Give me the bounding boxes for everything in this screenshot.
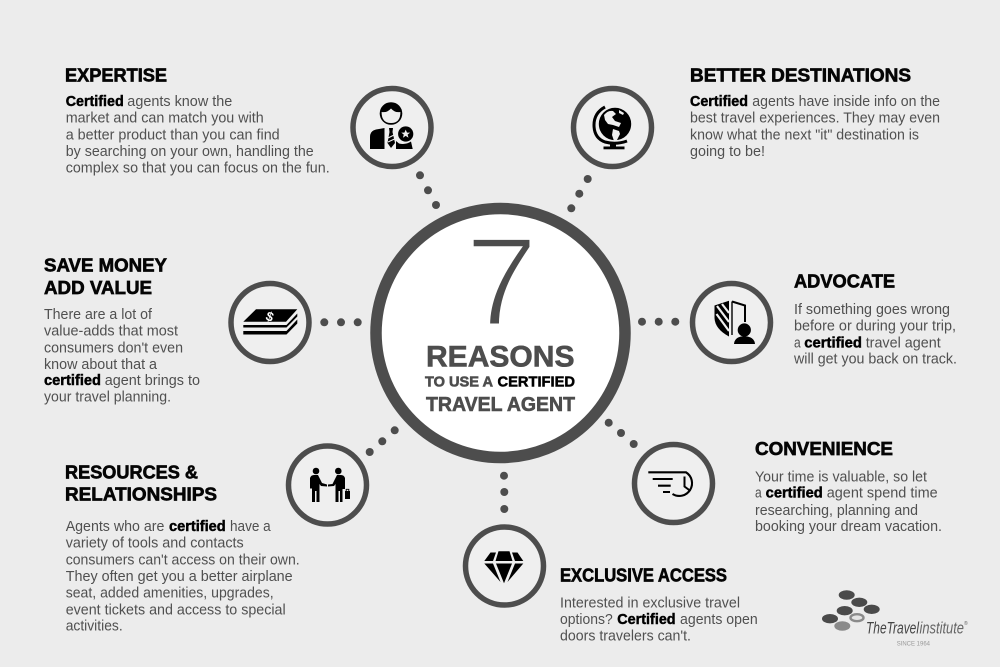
body: resources: activities.	[66, 619, 123, 635]
body: advocate: will get you back on track.	[793, 352, 957, 368]
icon: stack of money	[231, 284, 309, 362]
logo wordmark: institute	[920, 619, 964, 637]
icon: handshake	[288, 446, 366, 524]
body: exclusive access: Certified	[617, 612, 676, 628]
body: resources: variety of tools and contacts	[66, 536, 244, 552]
body: resources: have a	[230, 519, 272, 535]
body: expertise: a better product than you can find	[66, 127, 280, 143]
heading: resources and relationships	[65, 461, 217, 505]
panel: convenience	[755, 438, 942, 535]
body: convenience	[755, 470, 942, 535]
body: better destinations: going to be!	[690, 144, 765, 160]
body: expertise: by searching on your own, handling the	[66, 144, 314, 160]
body: exclusive access	[560, 595, 758, 645]
body: convenience: researching, planning and	[755, 503, 918, 519]
body: save money: know about that a	[44, 357, 158, 373]
body: convenience: booking your dream vacation.	[755, 519, 942, 535]
logo tagline: SINCE 1964	[897, 641, 930, 648]
body: advocate: certified	[804, 335, 862, 351]
heading: save money add value: ADD VALUE	[44, 277, 152, 298]
body: advocate: before or during your trip,	[794, 319, 956, 335]
heading: expertise: EXPERTISE	[65, 65, 167, 86]
heading: convenience: CONVENIENCE	[755, 438, 893, 459]
heading: advocate: ADVOCATE	[794, 271, 895, 292]
connector dots: better destinations	[567, 175, 592, 212]
body: resources	[66, 519, 300, 635]
body: resources: event tickets and access to special	[66, 602, 286, 618]
logo wordmark: TheTravel	[866, 619, 920, 637]
body: expertise: complex so that you can focus on the fun.	[66, 161, 330, 177]
connector dots: exclusive access	[500, 472, 508, 513]
connector dots: convenience	[605, 419, 638, 448]
body: advocate: travel agent	[866, 335, 941, 351]
hub subtitle: to use a certified	[425, 374, 575, 391]
panel: resources and relationships	[65, 461, 300, 635]
logo wordmark: ®	[964, 620, 968, 627]
connector dots: expertise	[416, 171, 440, 209]
body: advocate: If something goes wrong	[794, 302, 950, 318]
heading: resources and relationships: RELATIONSHIPS	[65, 484, 217, 505]
body: exclusive access: options?	[560, 612, 613, 628]
connector dots: save money	[320, 318, 362, 326]
numeral 7: 7	[466, 211, 538, 352]
body: resources: Agents who are	[66, 519, 164, 535]
heading: save money add value: SAVE MONEY	[44, 255, 168, 276]
logo: The Travel Institute	[822, 590, 968, 648]
body: convenience: agent spend time	[827, 486, 938, 502]
body: save money: agent brings to	[105, 373, 200, 389]
body: advocate	[793, 302, 957, 368]
icon: diamond	[466, 527, 544, 605]
panel: save money add value	[44, 255, 200, 406]
body: exclusive access: doors travelers can't.	[560, 629, 691, 645]
hub title: reasons: REASONS	[426, 341, 574, 374]
body: advocate: a	[794, 335, 801, 351]
hub subtitle: to use a certified: TO USE A	[425, 374, 493, 391]
dollar sign: $	[264, 308, 277, 325]
body: convenience: Your time is valuable, so let	[755, 470, 927, 486]
body: better destinations: agents have inside info on the	[752, 94, 940, 110]
connector dots: advocate	[638, 318, 679, 326]
body: better destinations: know what the next "it" destination is	[690, 127, 919, 143]
body: resources: certified	[169, 519, 226, 535]
body: expertise: Certified	[66, 94, 124, 110]
body: exclusive access: Interested in exclusive travel	[560, 595, 740, 611]
panel: exclusive access	[560, 565, 758, 645]
heading: exclusive access: EXCLUSIVE ACCESS	[560, 565, 727, 586]
hub subtitle: travel agent: TRAVEL AGENT	[426, 394, 575, 416]
body: save money: value-adds that most	[44, 324, 178, 340]
icon: globe	[574, 88, 652, 166]
body: convenience: certified	[766, 486, 823, 502]
icon: shield and person	[692, 284, 770, 362]
body: expertise: market and can match you with	[66, 111, 264, 127]
panel: advocate	[793, 271, 957, 368]
body: save money	[44, 307, 200, 406]
body: save money: certified	[44, 373, 101, 389]
body: resources: They often get you a better airplane	[66, 569, 293, 585]
body: save money: There are a lot of	[44, 307, 153, 323]
body: better destinations: Certified	[690, 94, 748, 110]
body: save money: your travel planning.	[44, 390, 171, 406]
body: better destinations: best travel experiences. They may even	[690, 111, 940, 127]
panel: expertise	[65, 65, 330, 177]
heading: save money add value	[44, 255, 168, 298]
body: save money: consumers don't even	[44, 340, 183, 356]
body: exclusive access: agents open	[680, 612, 758, 628]
body: convenience: a	[755, 486, 762, 502]
logo mark	[822, 590, 880, 631]
body: resources: seat, added amenities, upgrades,	[66, 586, 274, 602]
hub subtitle: to use a certified: CERTIFIED	[498, 374, 575, 391]
central hub: 7 reasons	[376, 208, 625, 458]
icon: expert with badge	[353, 88, 431, 166]
icon: fast clock	[634, 444, 712, 522]
panel: better destinations	[690, 65, 940, 160]
body: expertise	[66, 94, 330, 177]
body: expertise: agents know the	[127, 94, 232, 110]
heading: better destinations: BETTER DESTINATIONS	[690, 65, 911, 86]
connector dots: resources	[366, 426, 399, 456]
body: better destinations	[690, 94, 940, 160]
heading: resources and relationships: RESOURCES &	[65, 461, 198, 482]
body: resources: consumers can't access on their own.	[66, 552, 300, 568]
